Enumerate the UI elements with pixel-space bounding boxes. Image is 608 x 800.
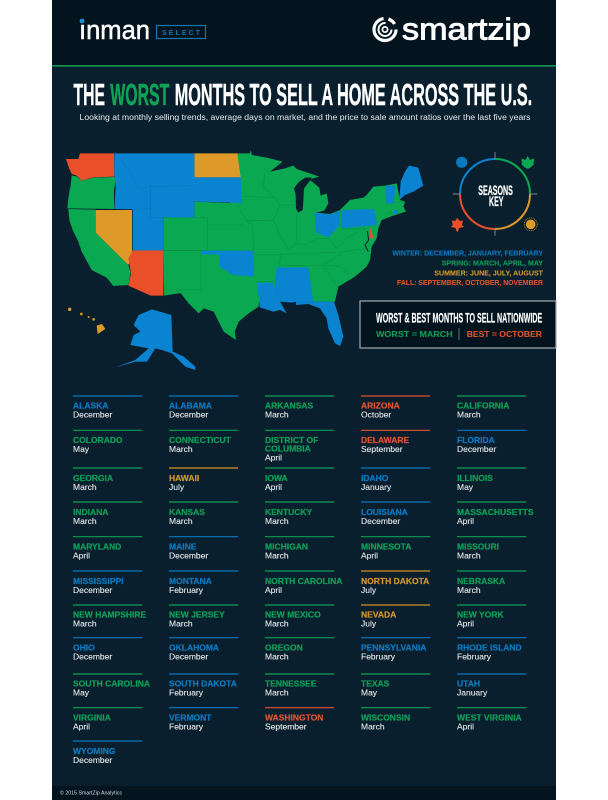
state: New Mexico: NEW MEXICO <box>265 610 321 620</box>
state: Florida: FLORIDA <box>457 435 495 445</box>
icon: leaves <box>522 156 534 168</box>
state: Illinois: ILLINOIS <box>457 473 493 483</box>
map: eastern states base <box>230 150 406 305</box>
state: Louisiana <box>361 502 430 526</box>
map: Idaho, Montana, Wyoming, Utah, South Dakota <box>114 153 242 250</box>
state: Illinois: May <box>457 482 474 492</box>
state: Nevada: NEVADA <box>361 610 396 620</box>
state: Oregon <box>265 638 334 662</box>
state: South Dakota <box>169 674 238 698</box>
state: District of Columbia <box>265 430 334 462</box>
state: Montana: MONTANA <box>169 576 212 586</box>
map: Vermont <box>385 186 396 203</box>
state: Rhode Island <box>457 638 526 662</box>
state: Colorado <box>73 430 142 454</box>
state: Alaska: ALASKA <box>73 401 108 411</box>
state: New Hampshire <box>73 605 147 629</box>
state: Wyoming <box>73 741 142 765</box>
state: Oregon: OREGON <box>265 642 303 652</box>
state: Pennsylvania: February <box>361 652 396 662</box>
callout: worst and best months nationwide <box>360 301 556 348</box>
state: Nebraska <box>457 571 526 595</box>
state: Iowa: IOWA <box>265 473 288 483</box>
state: Missouri <box>457 537 526 560</box>
state: Pennsylvania: PENNSYLVANIA <box>361 642 426 652</box>
state: Alabama <box>169 396 238 420</box>
state: New Mexico <box>265 605 334 629</box>
map: Delaware <box>370 228 374 238</box>
map: Louisiana <box>257 283 287 313</box>
map: Arizona <box>128 250 163 296</box>
seasons legend text <box>392 248 544 287</box>
state: Nevada <box>361 605 430 629</box>
state: Oklahoma: OKLAHOMA <box>169 642 219 652</box>
state: Tennessee: March <box>265 688 289 698</box>
state: South Carolina: May <box>73 688 90 698</box>
state: Louisiana: LOUISIANA <box>361 507 408 517</box>
state: District of Columbia: COLUMBIA <box>265 444 311 454</box>
state: Hawaii: HAWAII <box>169 473 199 483</box>
state: Michigan: MICHIGAN <box>265 542 308 552</box>
state: Texas: May <box>361 688 378 698</box>
state: Nebraska: March <box>457 585 481 595</box>
state: Arkansas: ARKANSAS <box>265 401 314 411</box>
state: Utah: January <box>457 688 488 698</box>
callout: worst and best months nationwide: BEST = OCTOBER <box>467 329 543 339</box>
state: Arkansas: March <box>265 410 289 420</box>
callout: worst and best months nationwide: WORST = MARCH <box>376 329 453 339</box>
state: Utah: UTAH <box>457 679 480 689</box>
map: Florida <box>296 302 343 346</box>
state: Mississippi <box>73 571 142 595</box>
state: Rhode Island: February <box>457 652 492 662</box>
state: Montana <box>169 571 238 595</box>
state: Delaware <box>361 430 430 454</box>
state: Kansas: KANSAS <box>169 507 205 517</box>
state: Alabama: December <box>169 410 208 420</box>
state: Connecticut: CONNECTICUT <box>169 435 232 445</box>
state: West Virginia: WEST VIRGINIA <box>457 713 522 723</box>
state: Iowa <box>265 468 334 492</box>
title: WORST <box>110 78 169 112</box>
state: Washington: September <box>265 722 307 732</box>
state: Massachusetts: MASSACHUSETTS <box>457 507 534 517</box>
state: New Hampshire: March <box>73 619 97 629</box>
state: Connecticut <box>169 430 238 454</box>
state: Missouri: March <box>457 550 481 560</box>
seasons legend text: FALL: SEPTEMBER, OCTOBER, NOVEMBER <box>397 278 544 287</box>
state: Massachusetts <box>457 502 534 526</box>
state: Mississippi: MISSISSIPPI <box>73 576 124 586</box>
state: Wisconsin: March <box>361 722 385 732</box>
state: Illinois <box>457 468 526 492</box>
state: New Jersey <box>169 605 238 629</box>
state: Virginia: April <box>73 722 90 732</box>
state: Virginia: VIRGINIA <box>73 713 111 723</box>
map: Nevada <box>96 210 132 265</box>
seasons legend text: SUMMER: JUNE, JULY, AUGUST <box>434 268 543 277</box>
map: Texas <box>164 254 259 340</box>
state: Washington: WASHINGTON <box>265 713 323 723</box>
state: California <box>457 396 526 420</box>
state: Georgia: GEORGIA <box>73 473 113 483</box>
state: Hawaii: July <box>169 482 185 492</box>
state: Colorado: May <box>73 444 90 454</box>
panel: header band <box>52 0 556 67</box>
seasons legend text: WINTER: DECEMBER, JANUARY, FEBRUARY <box>392 248 543 257</box>
state: Maryland <box>73 537 142 560</box>
state: Ohio <box>73 638 142 662</box>
ring label: KEY <box>489 194 504 209</box>
state: Nebraska: NEBRASKA <box>457 576 505 586</box>
map: Lake Michigan <box>294 177 312 213</box>
state: Oklahoma <box>169 638 238 662</box>
map: Maine <box>399 166 423 200</box>
icon: snowflake <box>456 157 467 168</box>
state: Arizona <box>361 396 430 420</box>
map: Oklahoma <box>201 251 254 277</box>
state: Michigan: March <box>265 550 289 560</box>
state: West Virginia <box>457 708 526 732</box>
state: Kentucky: KENTUCKY <box>265 507 313 517</box>
map: Alaska <box>115 309 195 370</box>
title: THE <box>74 78 105 112</box>
state: North Dakota <box>361 571 430 595</box>
state: Delaware: DELAWARE <box>361 435 410 445</box>
state: Louisiana: December <box>361 516 400 526</box>
ring label <box>478 183 513 209</box>
state: New Hampshire: NEW HAMPSHIRE <box>73 610 147 620</box>
map: state borders <box>164 173 403 290</box>
state: Colorado: COLORADO <box>73 435 123 445</box>
state: Utah <box>457 674 526 698</box>
state list <box>73 396 534 765</box>
footer <box>52 786 556 800</box>
icon: maple leaf <box>451 218 464 232</box>
logo: inman select: ınman <box>79 15 150 45</box>
map: Pennsylvania <box>341 209 377 228</box>
map: Rhode Island <box>394 210 398 214</box>
state: Tennessee <box>265 674 334 698</box>
state: District of Columbia: DISTRICT OF <box>265 435 318 445</box>
state: Florida: December <box>457 444 496 454</box>
state: Vermont <box>169 708 238 732</box>
footer: © 2015 SmartZip Analytics <box>60 790 122 796</box>
state: Wyoming: December <box>73 755 112 765</box>
state: Montana: February <box>169 585 204 595</box>
state: Ohio: OHIO <box>73 642 95 652</box>
state: Arizona: October <box>361 410 391 420</box>
state: Texas: TEXAS <box>361 679 390 689</box>
state: Missouri: MISSOURI <box>457 542 499 552</box>
state: Alabama: ALABAMA <box>169 401 212 411</box>
state: Maryland: MARYLAND <box>73 542 121 552</box>
state: Tennessee: TENNESSEE <box>265 679 317 689</box>
state: Nevada: July <box>361 619 377 629</box>
state: Georgia <box>73 468 142 492</box>
state: Kentucky: March <box>265 516 289 526</box>
state: Idaho: January <box>361 482 392 492</box>
logo: inman select: SELECT <box>162 30 201 37</box>
state: California: CALIFORNIA <box>457 401 509 411</box>
state: South Carolina: SOUTH CAROLINA <box>73 679 150 689</box>
seasons key <box>451 152 537 236</box>
state: Ohio: December <box>73 652 112 662</box>
state: Idaho: IDAHO <box>361 473 389 483</box>
state: Pennsylvania <box>361 638 430 662</box>
state: Minnesota <box>361 537 430 560</box>
state: New York: April <box>457 619 474 629</box>
state: Washington <box>265 708 334 732</box>
state: North Dakota: NORTH DAKOTA <box>361 576 429 586</box>
state: Delaware: September <box>361 444 403 454</box>
state: Michigan <box>265 537 334 560</box>
state: North Carolina <box>265 571 342 595</box>
state: Oklahoma: December <box>169 652 208 662</box>
map: Washington <box>66 153 114 181</box>
map: United States by worst month <box>66 150 423 370</box>
logo: smartzip: smartzip <box>402 11 531 46</box>
ring segments <box>453 152 537 236</box>
icon: sun <box>524 218 537 231</box>
state: New York <box>457 605 526 629</box>
state: Wisconsin <box>361 708 430 732</box>
map: Chesapeake Bay <box>365 231 369 252</box>
state: Mississippi: December <box>73 585 112 595</box>
map: Ohio <box>314 211 340 238</box>
ring label: SEASONS <box>478 183 513 198</box>
state: Oregon: March <box>265 652 289 662</box>
state: North Carolina: April <box>265 585 282 595</box>
state: Kentucky <box>265 502 334 526</box>
state: Vermont: February <box>169 722 204 732</box>
state: Kansas <box>169 502 238 526</box>
state: New Jersey: March <box>169 619 193 629</box>
state: North Carolina: NORTH CAROLINA <box>265 576 342 586</box>
logo: inman select <box>79 15 206 45</box>
state: Connecticut: March <box>169 444 193 454</box>
state: Maine: December <box>169 550 208 560</box>
state: Iowa: April <box>265 482 282 492</box>
state: New Mexico: March <box>265 619 289 629</box>
state: Wyoming: WYOMING <box>73 746 116 756</box>
state: Alaska: December <box>73 410 112 420</box>
state: West Virginia: April <box>457 722 474 732</box>
state: Arkansas <box>265 396 334 420</box>
state: Maine: MAINE <box>169 542 197 552</box>
map: North Dakota <box>194 153 241 177</box>
state: Maryland: April <box>73 550 90 560</box>
state: Alaska <box>73 396 142 420</box>
state: Florida <box>457 430 526 454</box>
state: Maine <box>169 537 238 560</box>
map: Hawaii <box>68 308 105 334</box>
state: New York: NEW YORK <box>457 610 504 620</box>
state: Minnesota: MINNESOTA <box>361 542 411 552</box>
state: Indiana: March <box>73 516 97 526</box>
state: South Carolina <box>73 674 150 698</box>
state: Arizona: ARIZONA <box>361 401 400 411</box>
state: New Jersey: NEW JERSEY <box>169 610 225 620</box>
seasons legend text: SPRING: MARCH, APRIL, MAY <box>442 258 543 267</box>
state: Rhode Island: RHODE ISLAND <box>457 642 522 652</box>
state: North Dakota: July <box>361 585 377 595</box>
state: Massachusetts: April <box>457 516 474 526</box>
state: Indiana <box>73 502 142 526</box>
state: District of Columbia: April <box>265 452 282 462</box>
title <box>74 78 532 112</box>
state: Hawaii <box>169 468 238 492</box>
state: Idaho <box>361 468 430 492</box>
state: Georgia: March <box>73 482 97 492</box>
state: South Dakota: February <box>169 688 204 698</box>
state: South Dakota: SOUTH DAKOTA <box>169 679 237 689</box>
map: Mississippi and Alabama <box>272 267 313 303</box>
state: California: March <box>457 410 481 420</box>
subtitle: Looking at monthly selling trends, average days on market, and the price to sale amount ratios over the last five years <box>80 112 530 122</box>
state: Kansas: March <box>169 516 193 526</box>
state: Texas <box>361 674 430 698</box>
state: Minnesota: April <box>361 550 378 560</box>
state: Virginia <box>73 708 142 732</box>
state: Vermont: VERMONT <box>169 713 212 723</box>
state: Wisconsin: WISCONSIN <box>361 713 410 723</box>
state: Indiana: INDIANA <box>73 507 108 517</box>
map: western and plains states base <box>67 176 260 296</box>
